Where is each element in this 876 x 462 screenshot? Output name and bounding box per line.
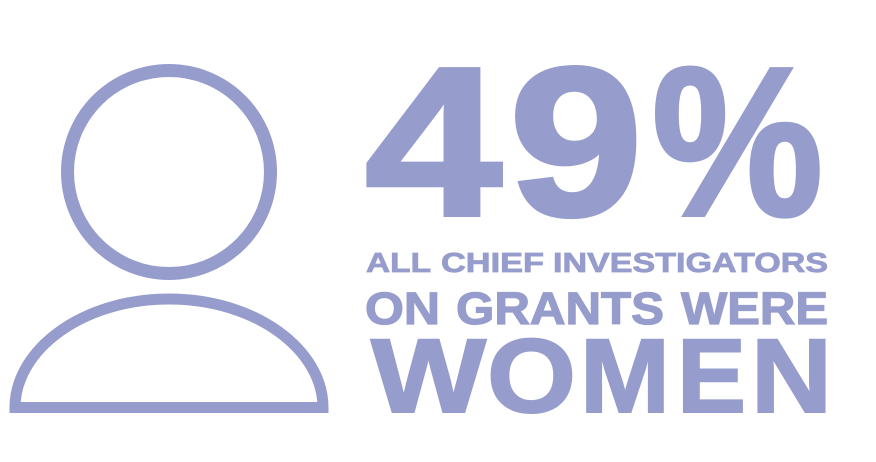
icon: person head (68, 70, 270, 274)
caption line 3: WOMEN: N (751, 318, 832, 435)
caption line 3: WOMEN: W (371, 318, 486, 435)
caption line 1: ALL (366, 247, 431, 278)
caption text (365, 247, 832, 435)
caption line 1 (366, 247, 828, 278)
headline statistic: 49% (365, 23, 823, 260)
icon: person (15, 70, 323, 408)
headline statistic: 49%: 4 (365, 23, 502, 260)
headline statistic: 49%: % (652, 23, 823, 260)
icon: person shoulders (15, 299, 323, 408)
caption line 2: ON (365, 283, 440, 334)
caption line 3: WOMEN: O (487, 318, 576, 435)
caption line 3: WOMEN (371, 318, 832, 435)
caption line 1: INVESTIGATORS (553, 247, 828, 278)
caption line 2 (365, 283, 828, 334)
caption line 1: CHIEF (441, 247, 544, 278)
headline statistic: 49%: 9 (509, 23, 643, 260)
caption line 3: WOMEN: M (580, 318, 670, 435)
caption line 3: WOMEN: E (677, 318, 746, 435)
caption line 2: GRANTS (456, 283, 664, 334)
caption line 2: WERE (681, 283, 828, 334)
